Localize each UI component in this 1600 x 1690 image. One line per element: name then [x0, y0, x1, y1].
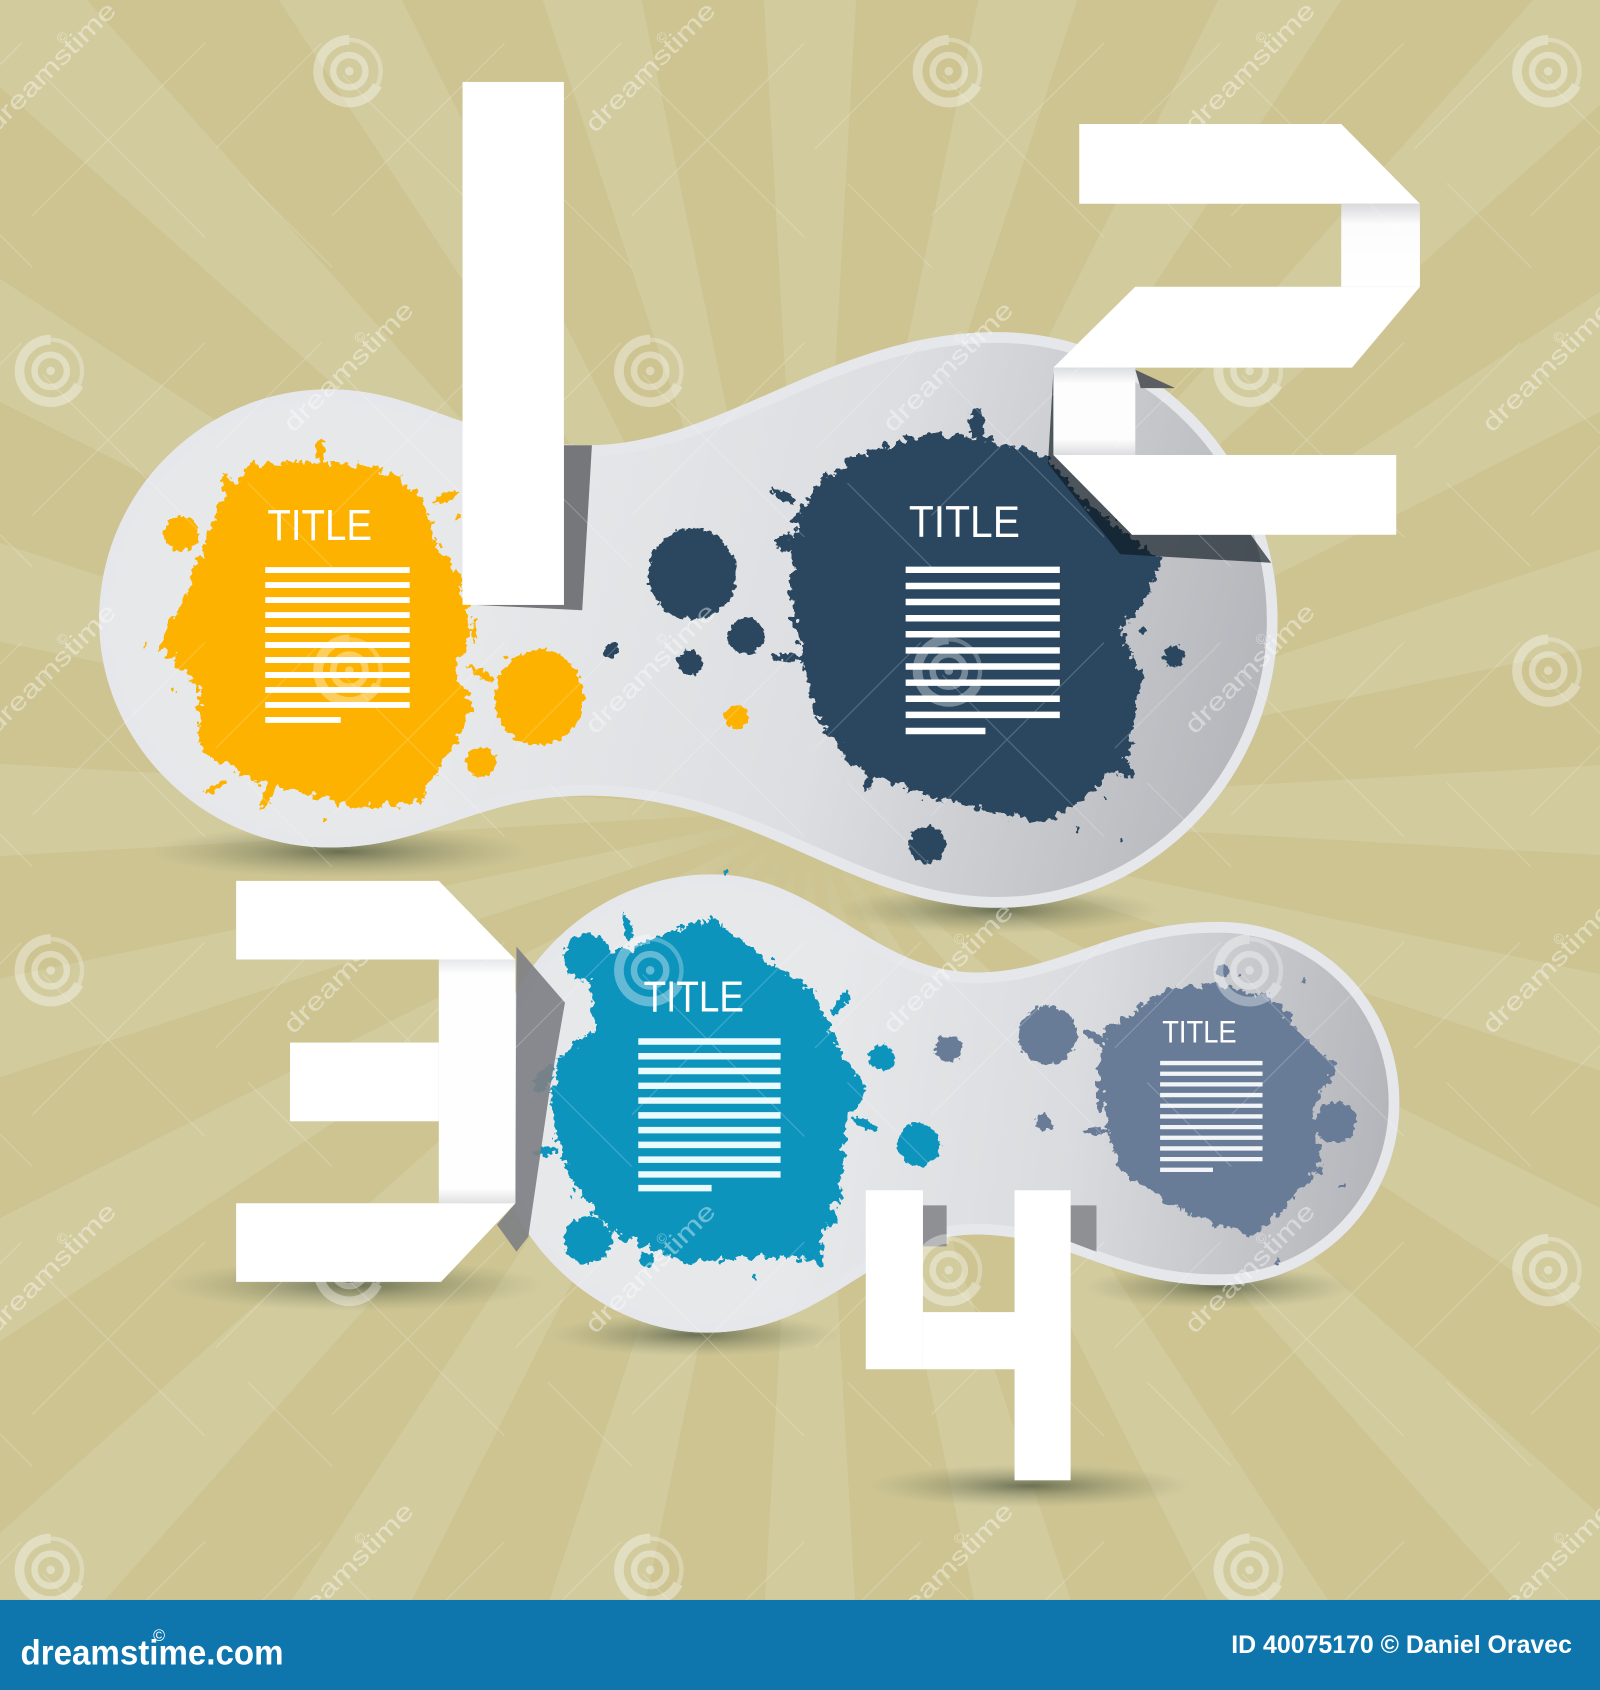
- title: TITLE: [267, 502, 372, 550]
- number 2: [1048, 124, 1420, 563]
- footer logo: dreamstime.com: [20, 1633, 284, 1673]
- text lines: [906, 567, 1060, 734]
- bottom strip: [1053, 455, 1396, 535]
- title: TITLE: [1162, 1015, 1237, 1050]
- text block: teal card: [638, 973, 781, 1191]
- cast shadows: [923, 1205, 947, 1246]
- top strip: [1079, 124, 1420, 204]
- title: TITLE: [644, 973, 744, 1021]
- left strip: [866, 1190, 923, 1369]
- cast shadow: [497, 947, 565, 1252]
- text lines: [638, 1038, 781, 1191]
- text lines: [1160, 1061, 1263, 1172]
- cast shadow: [474, 445, 592, 610]
- crossbar: [923, 1312, 1071, 1369]
- footer credit: ID 40075170 © Daniel Oravec: [1231, 1632, 1572, 1659]
- title: TITLE: [909, 498, 1020, 547]
- top strip: [236, 881, 515, 960]
- number 1: [463, 82, 592, 610]
- splat: yellow: [143, 437, 748, 824]
- vertical fold: [439, 960, 515, 1203]
- ground shadows: [151, 826, 1353, 1507]
- middle strip: [1053, 287, 1420, 368]
- number 4: [866, 1190, 1096, 1480]
- cast shadow: [1048, 372, 1271, 563]
- splat: teal: [530, 869, 940, 1280]
- text block: yellow card: [265, 502, 410, 723]
- text lines: [265, 567, 410, 723]
- footer logo mark: ©: [153, 1627, 165, 1645]
- splat: slate: [936, 964, 1356, 1264]
- middle strip: [290, 1043, 439, 1121]
- paper strip: [463, 82, 564, 605]
- panel: upper blob with steps 1 and 2: [99, 332, 1278, 908]
- lower fold: [1053, 368, 1135, 455]
- number 3: [236, 881, 565, 1282]
- right strip: [1015, 1190, 1071, 1480]
- panel: lower blob with steps 3 and 4: [487, 874, 1399, 1333]
- upper fold: [1341, 204, 1420, 287]
- text block: navy card: [906, 498, 1060, 734]
- text block: slate card: [1160, 1015, 1263, 1172]
- bottom strip: [236, 1203, 515, 1282]
- splat: navy: [604, 406, 1185, 863]
- footer bar: [0, 1600, 1600, 1690]
